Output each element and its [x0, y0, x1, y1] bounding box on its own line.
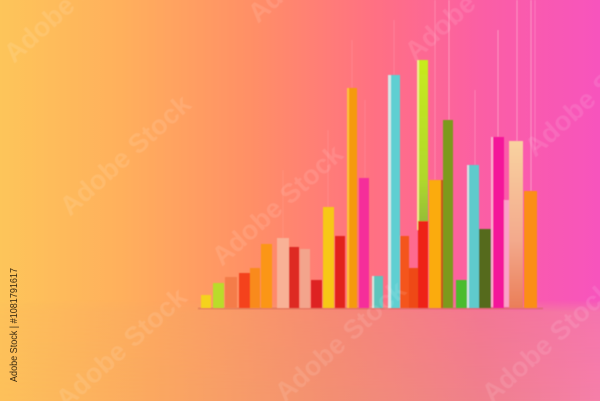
- floor: [228, 303, 600, 401]
- watermark: Adobe Stock repeats: Adobe Stock: [206, 138, 349, 271]
- stock id caption: Adobe Stock | #1081791617: [8, 268, 20, 382]
- floor shadow line: [198, 308, 543, 310]
- bar chart: [201, 60, 537, 308]
- watermark: Adobe Stock repeats: Adobe Stock: [54, 88, 197, 221]
- hanging threads: [283, 0, 535, 238]
